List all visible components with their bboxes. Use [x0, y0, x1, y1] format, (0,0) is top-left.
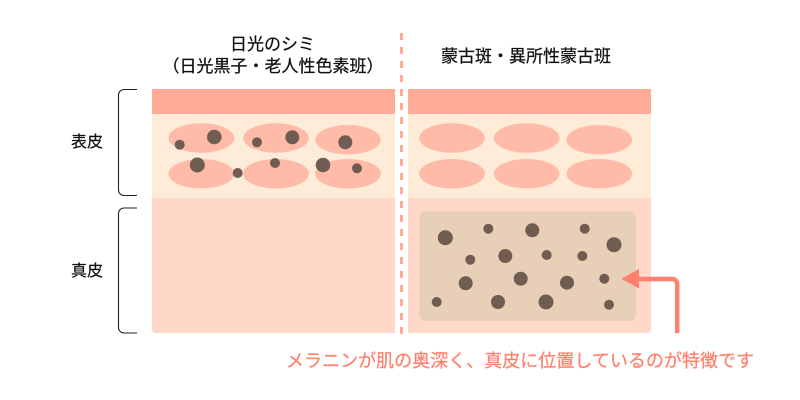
caption: メラニンが肌の奥深く、真皮に位置しているのが特徴です — [286, 351, 754, 371]
heading: solar lentigo — [162, 35, 384, 76]
layer: dermis — [152, 198, 395, 333]
heading: Mongolian spot: 蒙古斑・異所性蒙古班 — [441, 47, 611, 66]
layer: stratum corneum — [152, 89, 395, 114]
panel: Mongolian spot skin layers — [408, 89, 651, 333]
arrow: pointing to melanin — [621, 269, 677, 333]
bracket: dermis — [118, 208, 137, 333]
layer: stratum corneum — [408, 89, 651, 114]
heading: solar lentigo: 日光のシミ — [230, 35, 315, 54]
label: dermis: 真皮 — [71, 262, 103, 280]
melanin dots: epidermis — [175, 130, 362, 178]
melanin dots: dermis — [432, 223, 622, 310]
cells: epidermis cells — [419, 123, 632, 188]
panel: solar lentigo skin layers — [152, 89, 395, 333]
melanin area: dermis — [419, 211, 636, 321]
heading: solar lentigo: （日光黒子・老人性色素班） — [162, 57, 384, 76]
divider: dashed line — [400, 33, 403, 334]
bracket: epidermis — [118, 90, 137, 196]
layer: dermis — [408, 198, 651, 333]
layer: epidermis — [152, 114, 395, 198]
label: epidermis: 表皮 — [71, 133, 103, 151]
cells: epidermis cells — [168, 123, 381, 188]
layer: epidermis — [408, 114, 651, 198]
